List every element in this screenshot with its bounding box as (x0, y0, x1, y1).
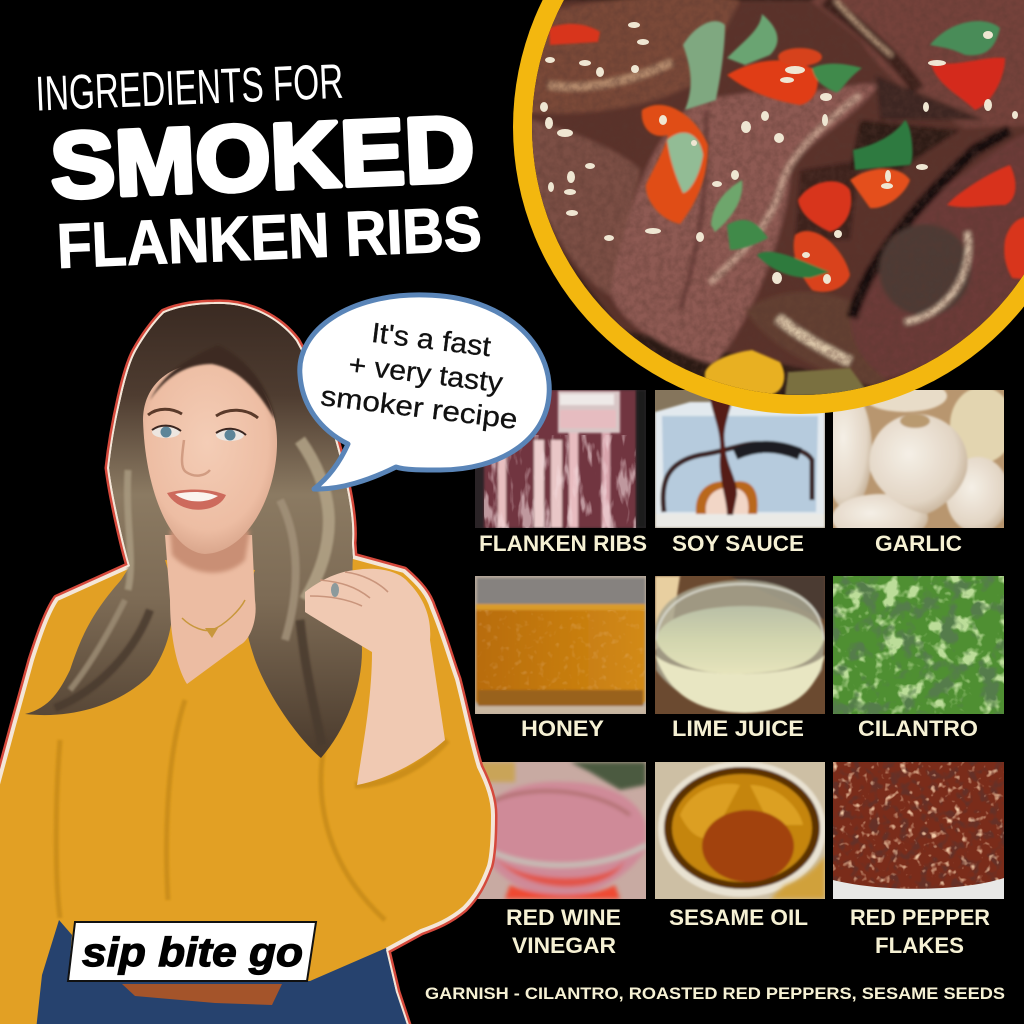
yellow tomato (705, 350, 784, 395)
hair strands (55, 440, 329, 745)
ingredient photo: sesame oil (655, 762, 825, 899)
neck shadow (170, 530, 250, 573)
ingredient photo: lime juice (655, 576, 825, 714)
title line: smoked: SMOKED (48, 96, 476, 218)
ingredient photo: red wine vinegar (478, 762, 646, 899)
label: red pepper flakes: RED PEPPER (850, 905, 990, 930)
ingredient photo: honey (475, 576, 646, 714)
label: red wine vinegar (506, 905, 621, 958)
label: lime juice: LIME JUICE (672, 716, 804, 741)
hair (25, 304, 362, 758)
jeans (36, 920, 412, 1024)
yellow ring (513, 0, 1024, 414)
ingredient photo: cilantro (833, 576, 1004, 714)
pendant (205, 628, 218, 638)
neck and chest (165, 535, 256, 684)
ingredient photo: soy sauce (655, 390, 825, 528)
title (34, 49, 483, 282)
logo: sip bite go (68, 922, 316, 981)
bubble shape (300, 295, 549, 489)
label: red wine vinegar: RED WINE (506, 905, 621, 930)
label: honey: HONEY (521, 716, 604, 741)
bubble text: + very tasty (347, 349, 504, 398)
title line: flanken ribs: FLANKEN RIBS (55, 194, 483, 282)
speech bubble (300, 295, 549, 489)
label: red pepper flakes (850, 905, 990, 958)
forearm and hand (305, 569, 445, 785)
title line: ingredients for: INGREDIENTS FOR (34, 55, 344, 122)
shirt shading (56, 700, 447, 920)
red peppers (549, 24, 1024, 292)
necklace (182, 600, 245, 630)
belt (122, 984, 282, 1005)
ingredient labels (425, 531, 1005, 1003)
face (143, 362, 277, 554)
logo box (68, 922, 316, 981)
ring (331, 583, 339, 597)
ingredient photo: red pepper flakes (833, 762, 1004, 899)
facial features (148, 409, 258, 510)
logo text: sip bite go (82, 929, 303, 975)
label: garlic: GARLIC (875, 531, 962, 556)
bubble text (319, 317, 519, 435)
ingredient photo: garlic (833, 390, 1004, 528)
person with white and red cut-out outline (0, 304, 493, 1024)
ingredient grid (475, 380, 1014, 899)
cilantro (667, 14, 1000, 278)
label: flanken ribs: FLANKEN RIBS (479, 531, 647, 556)
ribs photo (512, 0, 1024, 410)
label: soy sauce: SOY SAUCE (672, 531, 804, 556)
bubble text: smoker recipe (319, 380, 519, 435)
white inner outline (0, 304, 493, 1024)
finger lines (310, 572, 388, 606)
label: red wine vinegar: VINEGAR (512, 933, 616, 958)
hero photo circle: smoked flanken ribs (512, 0, 1024, 414)
sesame seeds (540, 22, 1018, 284)
hair part on forehead (150, 345, 275, 420)
label: cilantro: CILANTRO (858, 716, 978, 741)
bubble text: It's a fast (370, 317, 493, 362)
label: sesame oil: SESAME OIL (669, 905, 808, 930)
garnish note: GARNISH - CILANTRO, ROASTED RED PEPPERS, SESAME SEEDS (425, 984, 1005, 1003)
red outline (0, 304, 493, 1024)
label: red pepper flakes: FLAKES (875, 933, 964, 958)
ingredient photo: flanken ribs (475, 390, 646, 528)
